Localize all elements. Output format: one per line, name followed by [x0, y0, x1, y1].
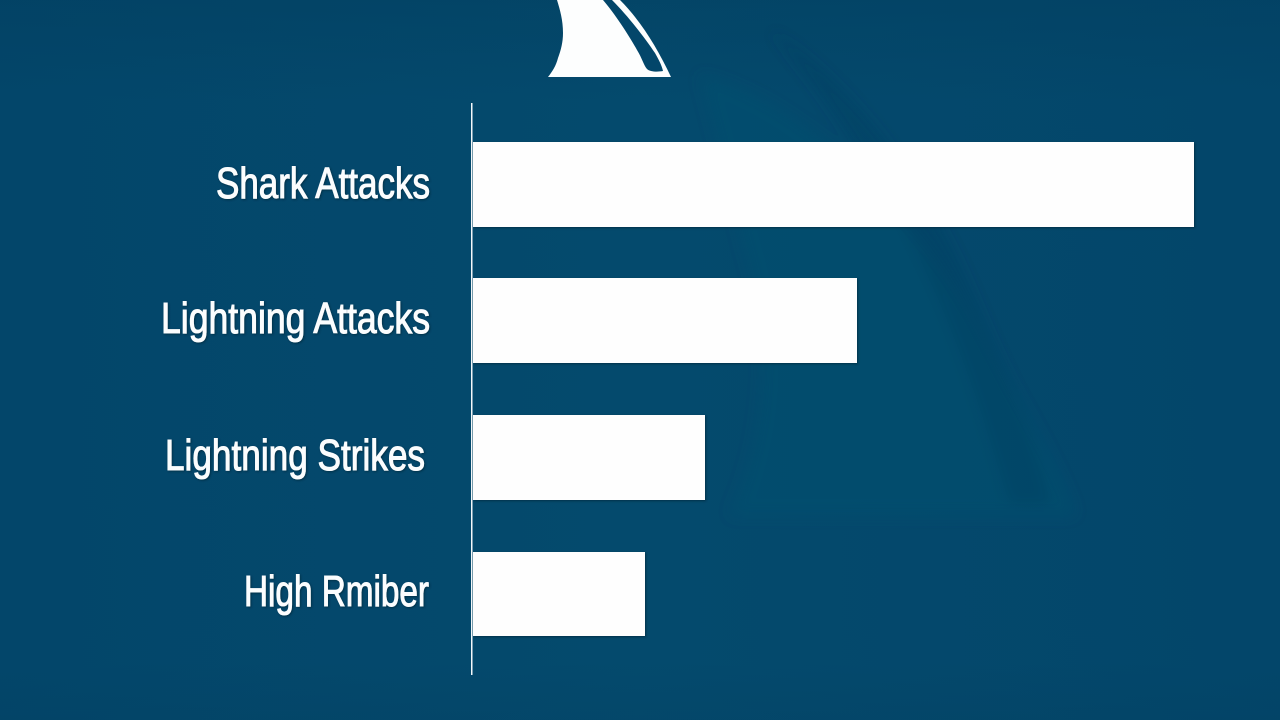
label: Lightning Attacks: Lightning Attacks — [161, 294, 430, 343]
label: High Rmiber: High Rmiber — [244, 567, 429, 616]
bar: Lightning Strikes — [473, 415, 705, 500]
watermark: large background shark fin — [700, 30, 1075, 515]
label: Shark Attacks: Shark Attacks — [216, 159, 430, 208]
chart: horizontal bars — [161, 103, 1194, 675]
bar: High Rmiber — [473, 552, 645, 636]
label: Lightning Strikes: Lightning Strikes — [165, 431, 425, 480]
icon: shark fin — [548, 0, 671, 77]
axis line — [471, 103, 472, 675]
bar: Shark Attacks — [473, 142, 1194, 227]
bar: Lightning Attacks — [473, 278, 857, 363]
